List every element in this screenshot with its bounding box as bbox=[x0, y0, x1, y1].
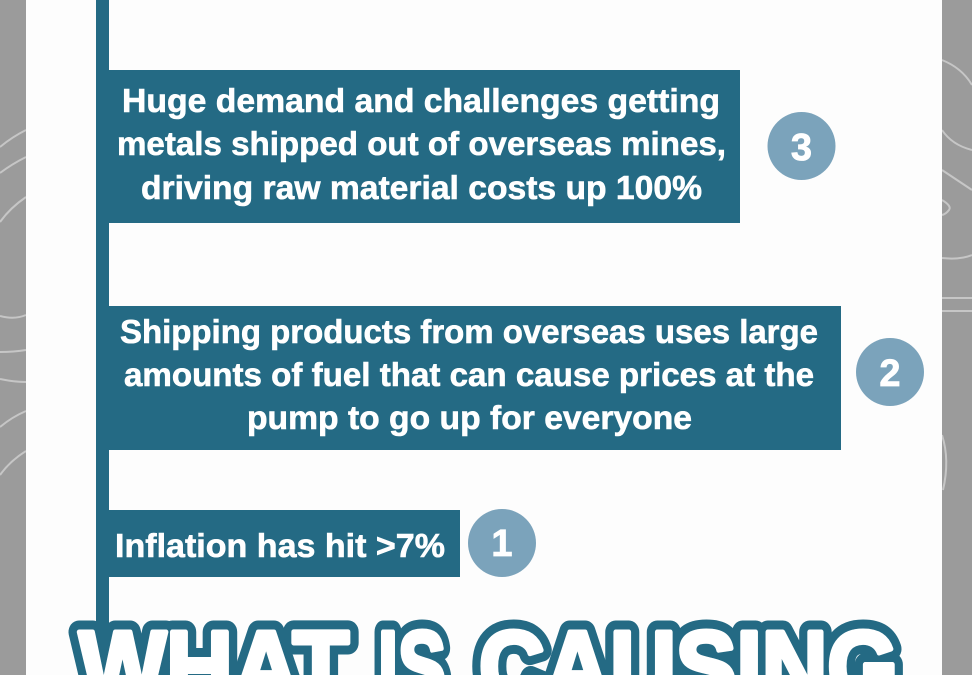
text: cause 3 description: metals shipped out of overseas mines, bbox=[117, 125, 726, 162]
panel: cause 1 bbox=[109, 510, 460, 577]
text: cause 3 description: Huge demand and challenges getting bbox=[122, 82, 720, 119]
text: cause 2 description: Shipping products from overseas uses large bbox=[120, 313, 818, 350]
title bbox=[68, 620, 903, 675]
text: cause 3 description: driving raw material costs up 100% bbox=[141, 169, 702, 206]
number badge 1 bbox=[468, 509, 536, 577]
number badge 1: 1 bbox=[491, 523, 513, 565]
number badge 2: 2 bbox=[879, 353, 901, 395]
vertical timeline bar bbox=[96, 0, 109, 640]
text: cause 2 description: amounts of fuel that can cause prices at the bbox=[124, 356, 814, 393]
text: cause 1 description: Inflation has hit >7% bbox=[115, 527, 445, 564]
number badge 3 bbox=[768, 112, 836, 180]
number badge 2 bbox=[856, 338, 924, 406]
text: cause 2 description bbox=[120, 313, 818, 436]
number badge 3: 3 bbox=[791, 127, 812, 169]
text: cause 3 description bbox=[117, 82, 726, 206]
panel: cause 2 bbox=[109, 306, 841, 450]
panel: cause 3 bbox=[109, 70, 740, 223]
text: cause 2 description: pump to go up for everyone bbox=[247, 399, 692, 436]
